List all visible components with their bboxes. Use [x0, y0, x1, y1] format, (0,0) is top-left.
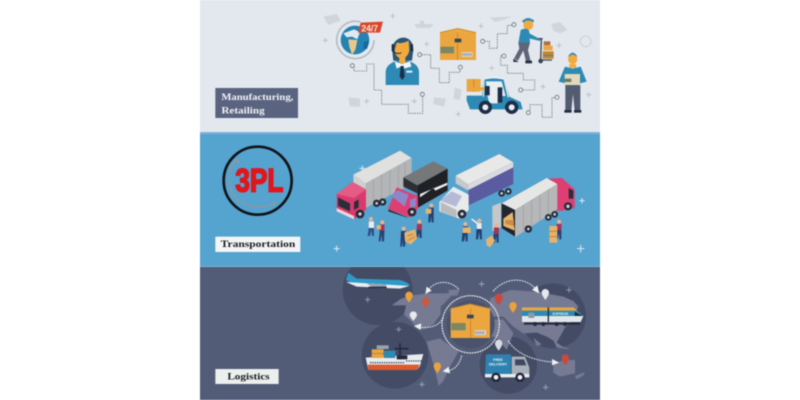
panel: logistics [200, 266, 600, 400]
train: EXPRESS [553, 312, 569, 316]
label: Manufacturing, Retailing [215, 88, 298, 118]
free delivery truck [485, 354, 529, 382]
location pins [405, 289, 569, 373]
icon: worker pushing cart [513, 18, 554, 63]
truck: pink cab, grey cargo [337, 151, 412, 219]
icon: 24/7 globe [337, 21, 383, 59]
icon: call-centre agent [386, 38, 419, 85]
train [522, 307, 583, 326]
label: Logistics [215, 369, 279, 384]
circle: plane [343, 267, 413, 325]
circle: ship [362, 322, 428, 389]
panel: transportation [200, 134, 600, 267]
world map [392, 289, 585, 386]
truck: pink cab, black cargo [388, 161, 448, 218]
free delivery truck: FREE [493, 358, 503, 362]
icon: standing worker with parcel [559, 53, 587, 113]
logo: 3PL [224, 147, 292, 215]
panel: manufacturing, retailing [200, 0, 600, 134]
label: Transportation: Transportation [221, 239, 296, 250]
truck: open grey cargo being loaded [492, 178, 575, 237]
label: Manufacturing, Retailing: Retailing [221, 105, 265, 116]
dotted routes with arrows [414, 280, 559, 373]
sparkles [334, 165, 585, 252]
central parcel circle [442, 296, 499, 353]
free delivery truck: DELIVERY [489, 363, 508, 367]
label: Manufacturing, Retailing: Manufacturing, [221, 92, 294, 103]
logo: 3PL: 3PL [235, 162, 283, 198]
label: Logistics: Logistics [227, 371, 270, 382]
icon: cargo buggy [467, 77, 523, 114]
faint background icons [323, 13, 591, 117]
circle: train backdrop [521, 283, 586, 349]
label: Transportation [215, 237, 300, 252]
icon: cardboard box [440, 29, 476, 60]
dotted route lines [350, 23, 559, 117]
sparkles [419, 281, 572, 390]
truck: white cab, purple cargo [439, 154, 513, 219]
loading workers and parcels [368, 203, 561, 247]
circle: delivery truck backdrop [480, 336, 537, 394]
icon: 24/7 globe: 24/7 [361, 23, 378, 33]
